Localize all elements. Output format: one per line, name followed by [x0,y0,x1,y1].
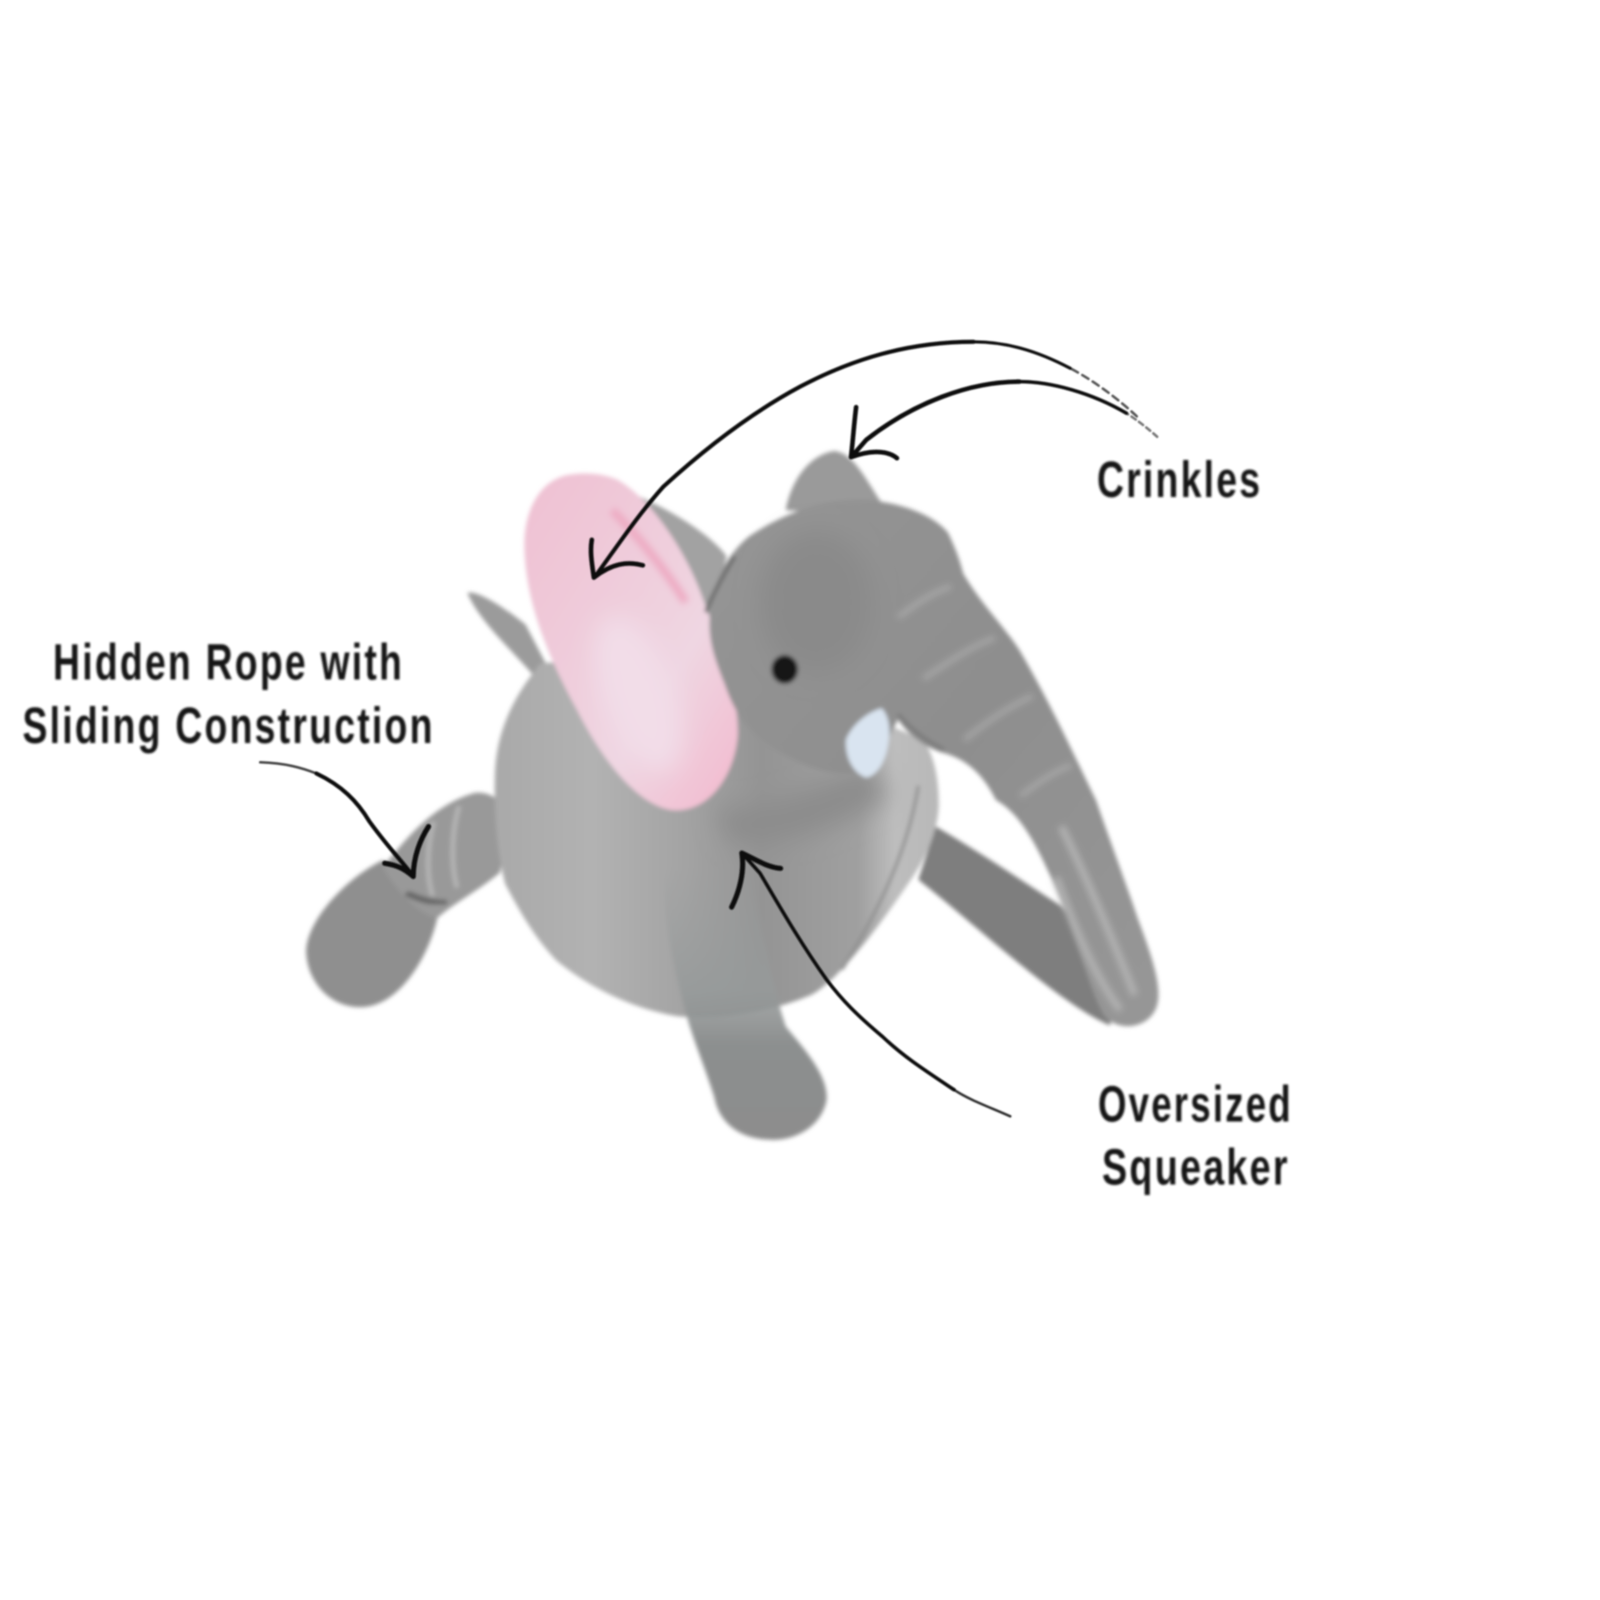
ear pink fold [612,510,686,602]
trunk wrinkles [898,587,1071,796]
back leg [918,827,1112,1026]
tail spike [467,592,551,682]
rope twist highlights [428,806,459,896]
head and trunk [709,500,1158,1026]
tusk [846,708,889,778]
label: hidden rope with sliding construction: Sliding Construction [22,697,435,754]
body seam [842,786,918,969]
front leg [663,867,827,1140]
mouth and head seam [898,714,944,750]
trunk lower highlight [1056,827,1135,1010]
label: oversized squeaker [1098,1075,1293,1196]
rope knot ball [306,860,439,1007]
arrow: ear [591,342,1137,578]
label: hidden rope with sliding construction [22,634,435,754]
arrow: oversized squeaker [732,853,1010,1116]
eye [771,655,798,684]
label: hidden rope with sliding construction: Hidden Rope with [53,634,404,691]
round body [495,653,939,1017]
arrow: crinkles [851,382,1157,458]
ear inner glow [576,605,699,783]
top ear nub [786,451,890,515]
twisted rope [383,793,508,918]
head shadow [760,531,872,673]
illustration: grey plush elephant toy [306,451,1158,1140]
label: oversized squeaker: Oversized [1098,1075,1293,1132]
pink ear [524,474,738,810]
rear ear flap [587,480,727,633]
chest shadow [714,765,888,843]
label: oversized squeaker: Squeaker [1102,1139,1290,1196]
arrow: hidden rope [260,762,429,877]
label: crinkles: Crinkles [1097,451,1262,508]
